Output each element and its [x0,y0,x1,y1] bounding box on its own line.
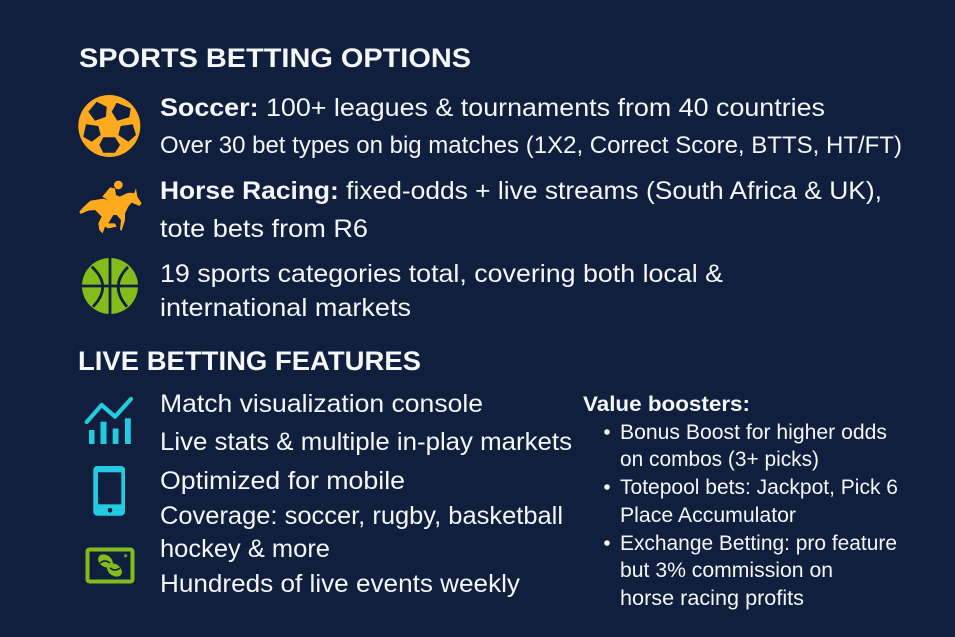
sports categories text block: international markets [160,294,411,322]
live features list: Optimized for mobile [160,467,405,495]
bullet: totepool bets: Place Accumulator [620,504,796,527]
live features list: Live stats & multiple in-play markets [160,428,572,456]
soccer text block: Soccer: 100+ leagues & tournaments from 40 countries [160,94,825,122]
icon: basketball [81,257,139,315]
horse racing text block: Horse Racing: fixed-odds + live streams (South Africa & UK), [160,177,882,205]
bullet: exchange betting: horse racing profits [620,587,804,610]
live features list: Hundreds of live events weekly [160,570,521,598]
bullet: exchange betting [604,532,897,610]
horse racing text block [160,177,882,243]
icon: horse and jockey [79,181,142,233]
soccer text block [160,94,902,159]
bullet: exchange betting: but 3% commission on [620,559,833,582]
heading: live betting features: LIVE BETTING FEATURES [78,346,421,376]
live features list: hockey & more [160,535,330,563]
heading: sports betting options: SPORTS BETTING OPTIONS [79,43,471,73]
icon: live match screen [88,550,132,582]
icon: mobile phone [93,466,125,516]
value boosters heading: Value boosters: [583,393,750,416]
bullet: bonus boost: on combos (3+ picks) [620,448,819,471]
bullet: exchange betting: Exchange Betting: pro feature [620,532,897,555]
bullet: bonus boost [604,421,887,471]
live features list: Coverage: soccer, rugby, basketball [160,502,563,530]
bullet: bonus boost: Bonus Boost for higher odds [620,421,887,444]
value boosters panel [583,393,898,610]
sports categories text block: 19 sports categories total, covering both local & [160,260,723,288]
horse racing text block: tote bets from R6 [160,215,368,243]
live features list: Match visualization console [160,390,483,418]
icon: soccer ball [78,95,140,157]
sports categories text block [160,260,723,322]
live features list [160,390,572,598]
bullet: totepool bets [604,476,898,527]
bullet: totepool bets: Totepool bets: Jackpot, Pick 6 [620,476,898,499]
icon: chart with trend line [87,399,131,444]
soccer text block: Over 30 bet types on big matches (1X2, Correct Score, BTTS, HT/FT) [160,132,902,159]
